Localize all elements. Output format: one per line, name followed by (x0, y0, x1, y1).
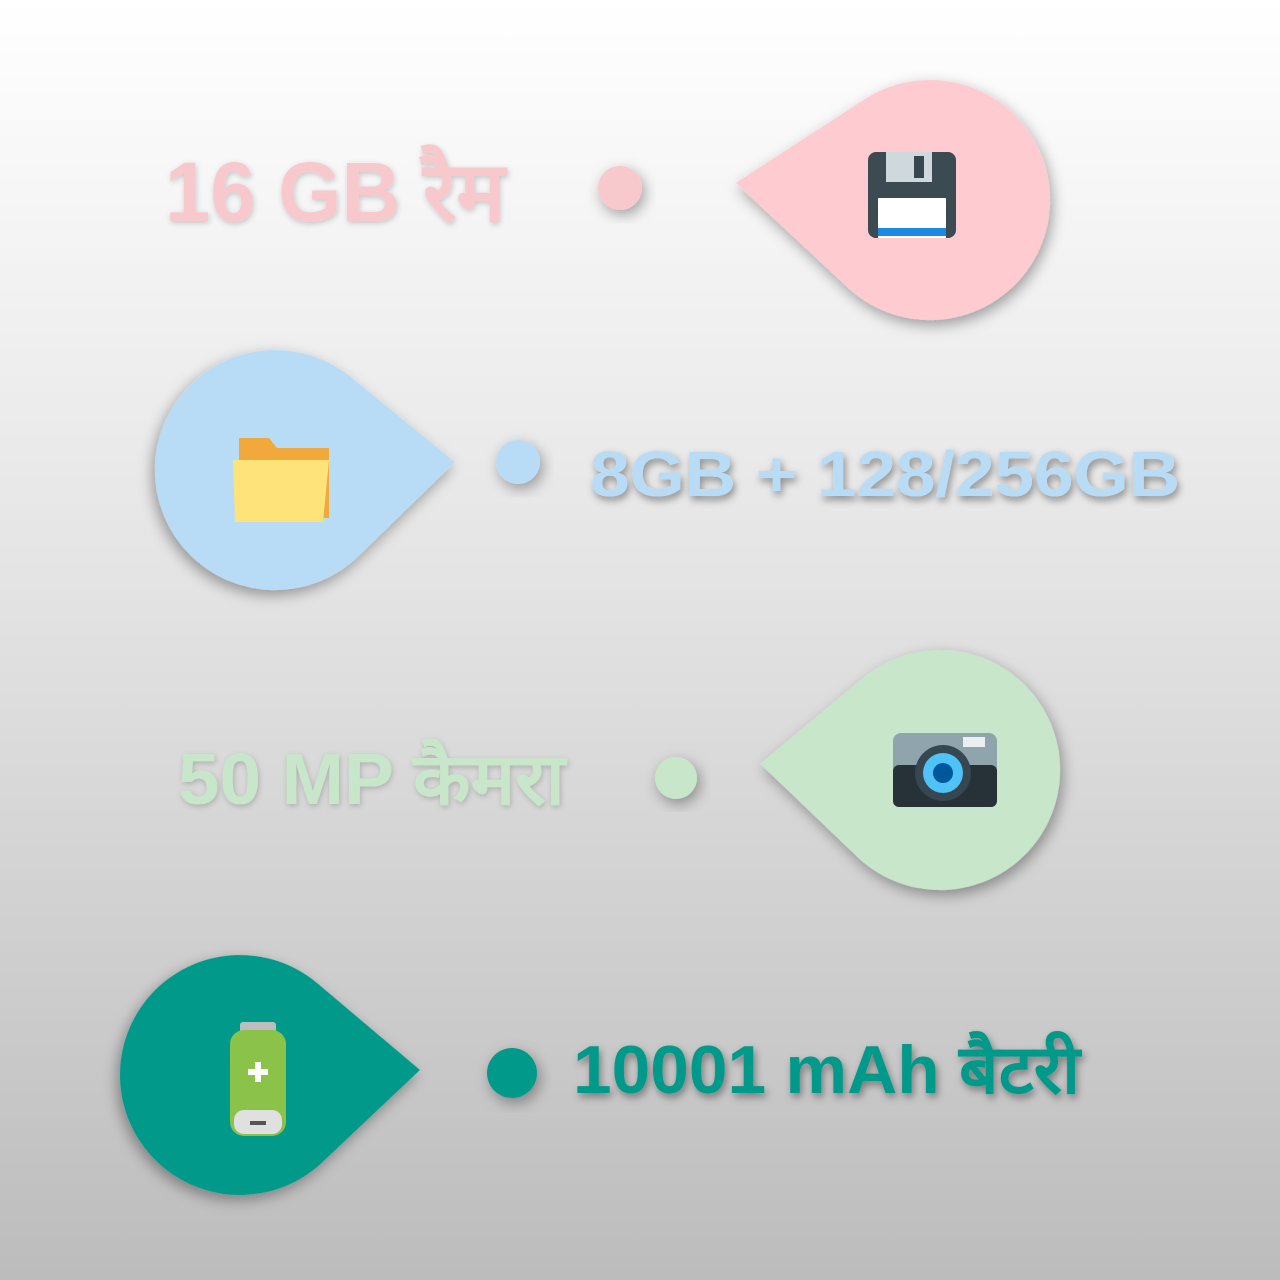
row 4 teardrop with battery icon (117, 950, 423, 1198)
row 2 dot (496, 440, 540, 484)
row 3 teardrop with camera icon (756, 644, 1064, 894)
row 1 teardrop with floppy icon (725, 63, 1060, 330)
row 3 dot (655, 757, 697, 799)
row 4 text: battery: 10001 mAh बैटरी (573, 1031, 1082, 1108)
row 2 teardrop with folder icon (150, 342, 460, 595)
icon: battery (230, 1022, 286, 1136)
row 3 text: camera: 50 MP कैमरा (178, 738, 567, 820)
icon: camera (893, 733, 997, 807)
icon: floppy disk (868, 152, 956, 238)
row 4 dot (487, 1048, 537, 1098)
row 2 text: storage: 8GB + 128/256GB (590, 438, 1180, 510)
icon: folder (233, 438, 329, 522)
row 1 text: 16 GB RAM: 16 GB रैम (165, 144, 508, 239)
row 1 dot (598, 166, 642, 210)
